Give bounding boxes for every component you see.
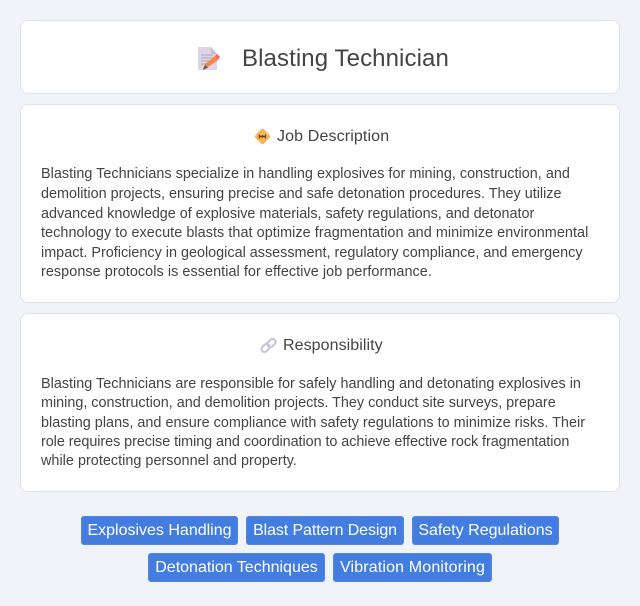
- text: job description: demolition projects, ensuring precise and safe detonation procedures. They utilize: [41, 186, 562, 202]
- title: Blasting Technician: [242, 45, 449, 72]
- text: job description: response protocols is essential for effective job performance.: [41, 264, 432, 280]
- panel: title card: [20, 20, 620, 94]
- tag: vibration monitoring: [333, 553, 492, 582]
- text: responsibility: Blasting Technicians are responsible for safely handling and detonating explosives in: [41, 376, 581, 392]
- text: responsibility: role requires precise timing and coordination to achieve effective rock fragmentation: [41, 434, 569, 450]
- text: job description: advanced knowledge of explosive materials, safety regulations, and detonator: [41, 206, 534, 222]
- text: responsibility: blasting plans, and ensure compliance with safety regulations to minimize risks. Their: [41, 415, 585, 431]
- icon: document with pencil: [198, 47, 220, 70]
- text: job description: technology to execute blasts that optimize fragmentation and minimize environmental: [41, 225, 588, 241]
- tag: safety regulations: Safety Regulations: [418, 522, 553, 539]
- heading: job description: Job Description: [277, 128, 389, 145]
- text: job description: impact. Proficiency in geological assessment, regulatory compliance, and emergency: [41, 245, 583, 261]
- tag: detonation techniques: Detonation Techniques: [155, 559, 318, 576]
- tag: safety regulations: [412, 516, 559, 545]
- text: job description: [41, 166, 588, 280]
- icon: road sign: [254, 128, 270, 144]
- text: responsibility: while protecting personnel and property.: [41, 453, 297, 469]
- tag: blast pattern design: Blast Pattern Design: [253, 522, 397, 539]
- icon: chain link: [260, 338, 276, 353]
- heading: responsibility: Responsibility: [283, 337, 383, 354]
- tag: vibration monitoring: Vibration Monitoring: [340, 559, 485, 576]
- text: job description: Blasting Technicians specialize in handling explosives for mining, construction, and: [41, 166, 570, 182]
- text: responsibility: mining, construction, and demolition projects. They conduct site surveys, prepare: [41, 395, 556, 411]
- text: responsibility: [41, 376, 585, 469]
- panel: job description: [20, 104, 620, 303]
- tag: explosives handling: [81, 516, 238, 545]
- tag: blast pattern design: [246, 516, 404, 545]
- tag: explosives handling: Explosives Handling: [87, 522, 232, 539]
- panel: responsibility: [20, 313, 620, 492]
- tag: detonation techniques: [148, 553, 325, 582]
